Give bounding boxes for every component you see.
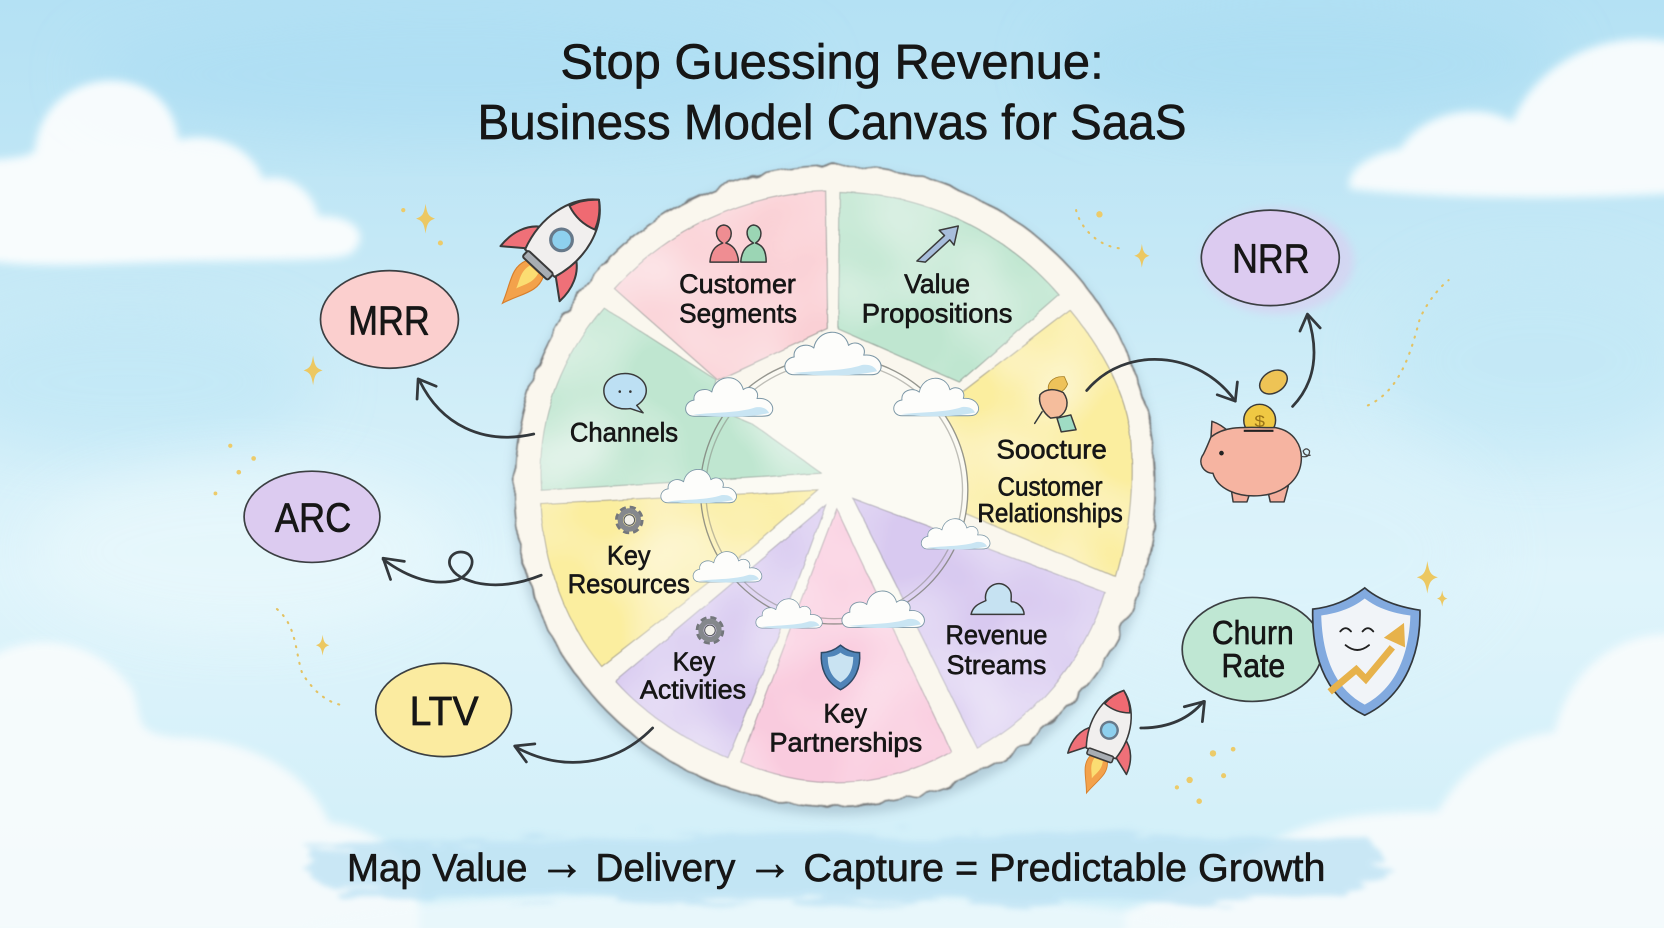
footer tagline: Delivery (595, 846, 736, 890)
label: value propositions: Propositions (862, 299, 1012, 329)
title: Stop Guessing Revenue: (560, 36, 1104, 90)
label: customer relationships (977, 474, 1123, 528)
segment: channels (541, 308, 821, 490)
icon: arrow up right (917, 226, 958, 262)
label: customer segments: Customer (679, 269, 796, 299)
title (478, 36, 1186, 150)
icon: shield with growth arrow (1313, 588, 1420, 715)
segment: customer relationships (934, 310, 1132, 577)
label: revenue streams: Streams (947, 650, 1046, 680)
icon: cloud revenue (971, 584, 1024, 614)
segment: key resources (541, 490, 818, 666)
label: key activities: Key (673, 649, 716, 677)
bubble: churn rate: Churn (1212, 614, 1294, 651)
icon: shield small (821, 645, 860, 690)
footer tagline (347, 834, 1325, 891)
label: revenue streams (946, 620, 1047, 680)
label: key resources: Key (607, 541, 651, 571)
wheel shadow (513, 170, 1158, 815)
footer tagline: Capture = Predictable Growth (803, 846, 1325, 890)
cloud: bottom right (1125, 634, 1664, 928)
segment: key partnerships (741, 508, 951, 782)
arrow: channels to MRR (417, 379, 534, 437)
label: key activities (640, 649, 746, 704)
wheel rim (515, 166, 1156, 806)
dotted trails (277, 210, 1449, 705)
bubble: LTV (376, 663, 512, 757)
footer brush stripe (308, 834, 1388, 902)
label: customer segments: Segments (679, 299, 797, 329)
icon: piggy bank (1201, 365, 1311, 502)
title: Business Model Canvas for SaaS (478, 96, 1186, 150)
hub ring (700, 357, 968, 624)
bubble: ARC: ARC (275, 495, 351, 541)
label: customer segments (679, 269, 797, 329)
cloud: bottom centre (297, 892, 1189, 928)
sparkles (214, 204, 1447, 804)
bubble: churn rate: Rate (1221, 647, 1285, 684)
arrow: piggy to NRR (1293, 314, 1320, 406)
label: key resources (568, 541, 690, 599)
cloud: top left (0, 81, 360, 265)
bubble: ARC (244, 471, 380, 562)
icon: gear resources (618, 509, 640, 531)
canvas wheel (513, 166, 1158, 815)
arrow: key activities to LTV (515, 728, 653, 762)
bubble: LTV: LTV (410, 688, 479, 734)
label: value propositions: Value (904, 269, 970, 299)
icon: gear activities (699, 619, 721, 641)
segment: key activities (616, 505, 826, 758)
label: key resources: Resources (568, 569, 690, 599)
arrow: key resources to ARC (383, 552, 541, 585)
icon: people (710, 225, 766, 262)
segment: customer segments (614, 191, 828, 380)
segment: value propositions (838, 192, 1059, 382)
rocket: top left (473, 172, 629, 331)
label: key partnerships: Partnerships (769, 727, 922, 757)
rocket: bottom right (1057, 680, 1153, 804)
cloud: bottom left (0, 642, 419, 928)
label: garbled heading: Soocture (996, 434, 1107, 464)
icon: piggy bank: $ (1254, 414, 1265, 431)
arrow: customer relationships to piggy (1087, 359, 1237, 401)
label: customer relationships: Relationships (977, 500, 1123, 528)
icon: speech bubble (604, 374, 646, 413)
arrow: rocket to churn (1141, 701, 1204, 728)
footer tagline: → (539, 834, 585, 891)
label: key activities: Activities (640, 676, 746, 704)
label: revenue streams: Revenue (946, 620, 1047, 650)
footer tagline: Map Value (347, 846, 527, 890)
label: key partnerships (769, 699, 922, 757)
bubble: NRR (1201, 208, 1354, 314)
bubble: churn rate (1182, 597, 1322, 701)
bubble: MRR: MRR (348, 297, 430, 343)
label: value propositions (862, 269, 1012, 329)
bubble: MRR (320, 271, 458, 368)
icon: hand (1035, 377, 1076, 432)
hub clouds (661, 332, 990, 629)
segment: revenue streams (853, 499, 1105, 748)
cloud: top right (1349, 39, 1664, 197)
bubble: NRR: NRR (1232, 236, 1310, 282)
hub (700, 357, 968, 624)
footer tagline: → (747, 834, 793, 891)
label: key partnerships: Key (824, 699, 868, 729)
label: channels: Channels (570, 417, 678, 447)
label: customer relationships: Customer (998, 474, 1103, 502)
